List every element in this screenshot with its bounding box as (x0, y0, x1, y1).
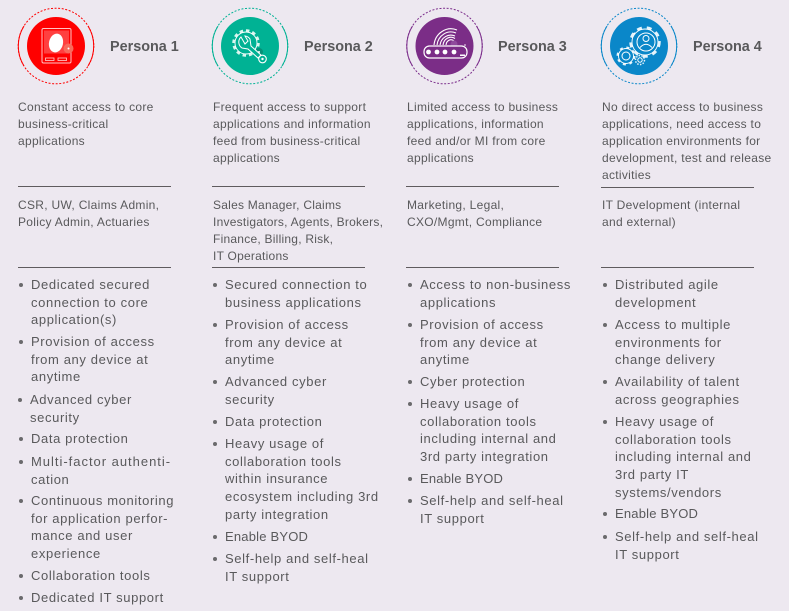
bullet list: anytime (31, 369, 81, 384)
description (18, 100, 154, 148)
description: applications (213, 151, 280, 165)
bullet list: 3rd party integration (420, 449, 549, 464)
roles: IT Development (internal (602, 198, 740, 212)
bullet list: Enable BYOD (225, 529, 308, 544)
bullet list: business applications (225, 295, 362, 310)
bullet list: including internal and (615, 449, 752, 464)
bullet list: across geographies (615, 392, 740, 407)
roles (602, 198, 740, 229)
bullet list: collaboration tools (615, 432, 732, 447)
description: Constant access to core (18, 100, 154, 114)
bullet list: Provision of access (225, 317, 349, 332)
roles: CXO/Mgmt, Compliance (407, 215, 542, 229)
description: applications (407, 151, 474, 165)
description: development, test and release (602, 151, 771, 165)
bullet list: Collaboration tools (31, 568, 150, 583)
bullet list: Advanced cyber (225, 374, 327, 389)
bullet list: from any device at (420, 335, 537, 350)
bullet list: from any device at (225, 335, 342, 350)
description: business-critical (18, 117, 108, 131)
roles: Sales Manager, Claims (213, 198, 341, 212)
bullet list: systems/vendors (615, 485, 722, 500)
roles: CSR, UW, Claims Admin, (18, 198, 159, 212)
icon: wireless router (406, 8, 483, 84)
bullet list: from any device at (31, 352, 148, 367)
roles (213, 198, 383, 263)
roles: Marketing, Legal, (407, 198, 504, 212)
description (407, 100, 558, 165)
bullet list: Data protection (31, 431, 128, 446)
description: applications, information (407, 117, 544, 131)
bullet list: Enable BYOD (615, 506, 698, 521)
bullet list: environments for (615, 335, 722, 350)
bullet list: applications (420, 295, 496, 310)
bullet list: Continuous monitoring (31, 493, 174, 508)
roles: Investigators, Agents, Brokers, (213, 215, 383, 229)
description: applications (18, 134, 85, 148)
description (602, 100, 771, 182)
bullet list: Secured connection to (225, 277, 367, 292)
bullet list: development (615, 295, 696, 310)
heading: persona 3: Persona 3 (498, 39, 567, 55)
roles: and external) (602, 215, 676, 229)
bullet list: Heavy usage of (615, 414, 714, 429)
bullet list: Distributed agile (615, 277, 719, 292)
bullet list (603, 277, 759, 562)
roles: IT Operations (213, 249, 289, 263)
description: applications, need access to (602, 117, 761, 131)
bullet list: mance and user (31, 528, 133, 543)
description: Frequent access to support (213, 100, 366, 114)
panel: persona 3 (406, 8, 571, 526)
bullet list: change delivery (615, 352, 715, 367)
bullet list: Advanced cyber (30, 392, 132, 407)
roles: Policy Admin, Actuaries (18, 215, 150, 229)
description (213, 100, 371, 165)
roles (18, 198, 159, 229)
bullet list: Dedicated IT support (31, 590, 164, 605)
bullet list: IT support (615, 547, 680, 562)
bullet list: experience (31, 546, 101, 561)
description: feed from business-critical (213, 134, 360, 148)
bullet list: anytime (420, 352, 470, 367)
description: application environments for (602, 134, 760, 148)
bullet list: Cyber protection (420, 374, 525, 389)
bullet list: Enable BYOD (420, 471, 503, 486)
bullet list: 3rd party IT (615, 467, 689, 482)
heading: persona 2: Persona 2 (304, 39, 373, 55)
heading: persona 4: Persona 4 (693, 39, 762, 55)
bullet list: for application perfor- (31, 511, 168, 526)
bullet list: cation (31, 472, 69, 487)
bullet list: IT support (225, 569, 290, 584)
roles (407, 198, 542, 229)
description: Limited access to business (407, 100, 558, 114)
bullet list (408, 277, 571, 526)
bullet list: Self-help and self-heal (615, 529, 759, 544)
description: feed and/or MI from core (407, 134, 546, 148)
heading: persona 1: Persona 1 (110, 39, 179, 55)
bullet list: Provision of access (31, 334, 155, 349)
bullet list: connection to core (31, 295, 148, 310)
bullet list: security (225, 392, 275, 407)
bullet list (213, 277, 379, 584)
icon: gear and wrench (212, 8, 288, 84)
bullet list: Self-help and self-heal (225, 551, 369, 566)
bullet list: Heavy usage of (225, 436, 324, 451)
description: applications and information (213, 117, 371, 131)
description: No direct access to business (602, 100, 763, 114)
bullet list: ecosystem including 3rd (225, 489, 379, 504)
bullet list: Multi-factor authenti- (31, 454, 171, 469)
bullet list: anytime (225, 352, 275, 367)
bullet list (18, 277, 174, 605)
bullet list: Access to multiple (615, 317, 731, 332)
bullet list: party integration (225, 507, 329, 522)
bullet list: collaboration tools (420, 414, 537, 429)
icon: gears with person (600, 8, 678, 84)
bullet list: application(s) (31, 312, 117, 327)
bullet list: within insurance (225, 471, 328, 486)
description: activities (602, 168, 651, 182)
roles: Finance, Billing, Risk, (213, 232, 333, 246)
panel: persona 4 (600, 8, 771, 562)
bullet list: including internal and (420, 431, 557, 446)
bullet list: collaboration tools (225, 454, 342, 469)
bullet list: Dedicated secured (31, 277, 150, 292)
bullet list: Access to non-business (420, 277, 571, 292)
bullet list: Data protection (225, 414, 322, 429)
bullet list: Self-help and self-heal (420, 493, 564, 508)
bullet list: IT support (420, 511, 484, 526)
panel: persona 2 (212, 8, 383, 584)
bullet list: Availability of talent (615, 374, 740, 389)
bullet list: Provision of access (420, 317, 544, 332)
bullet list: security (30, 410, 80, 425)
icon: fingerprint scanner (18, 8, 94, 84)
panel: persona 1 (18, 8, 179, 605)
bullet list: Heavy usage of (420, 396, 519, 411)
